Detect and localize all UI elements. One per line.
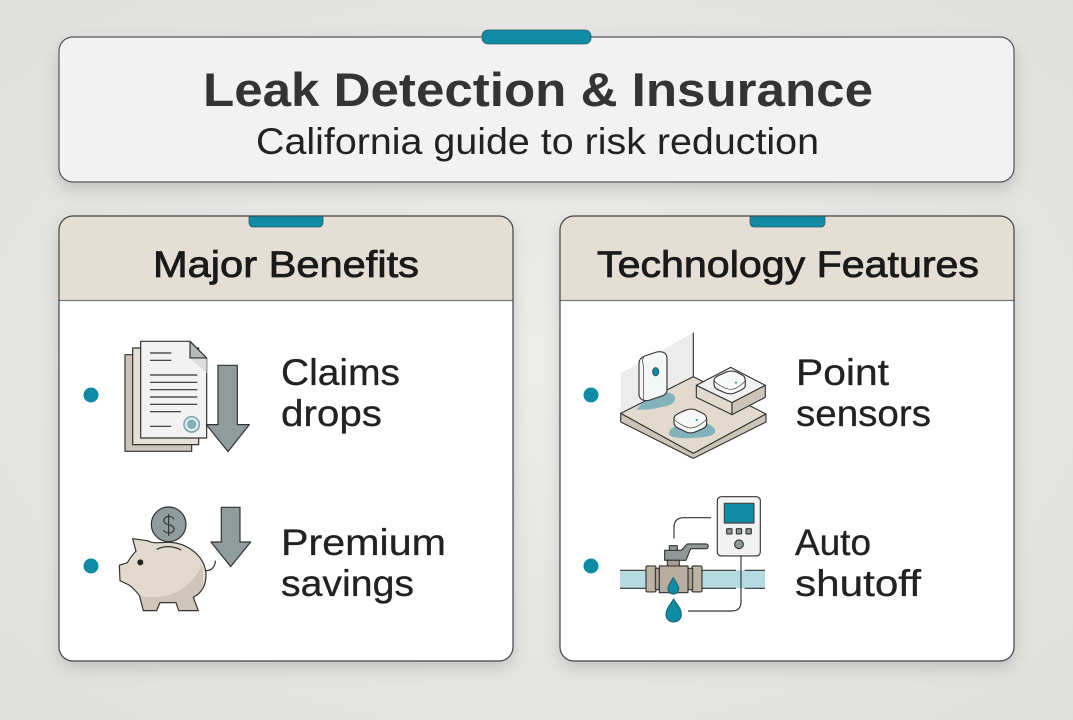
title panel bbox=[59, 30, 1014, 182]
icon: auto shutoff valve and controller bbox=[620, 497, 765, 622]
heading: major benefits: Major Benefits bbox=[153, 244, 419, 285]
bullet: point sensors bbox=[584, 388, 598, 402]
subtitle: California guide to risk reduction bbox=[256, 121, 819, 162]
label: claims drops: drops bbox=[281, 393, 382, 434]
icon: piggy bank with coin and down arrow bbox=[119, 507, 251, 611]
title: Leak Detection & Insurance bbox=[203, 63, 873, 116]
panel: technology features bbox=[560, 210, 1014, 661]
heading: technology features: Technology Features bbox=[597, 244, 979, 285]
label: point sensors: Point bbox=[796, 352, 890, 393]
label: claims drops: Claims bbox=[281, 352, 400, 393]
bullet: claims bbox=[84, 388, 98, 402]
panel: major benefits bbox=[59, 210, 513, 661]
title accent tab bbox=[482, 30, 591, 44]
floor sensor bbox=[674, 409, 707, 433]
label: point sensors: sensors bbox=[796, 393, 931, 434]
label: premium savings: savings bbox=[281, 563, 414, 604]
label: auto shutoff: shutoff bbox=[795, 563, 922, 604]
icon: claim documents with down arrow bbox=[125, 341, 249, 452]
bullet: premium bbox=[84, 558, 98, 574]
raised sensor bbox=[714, 371, 745, 394]
bullet: auto shutoff bbox=[584, 558, 598, 574]
wall sensor bbox=[639, 352, 667, 401]
icon: point sensors on floor bbox=[621, 333, 766, 458]
label: auto shutoff: Auto bbox=[795, 522, 871, 563]
label: premium savings: Premium bbox=[281, 522, 446, 563]
